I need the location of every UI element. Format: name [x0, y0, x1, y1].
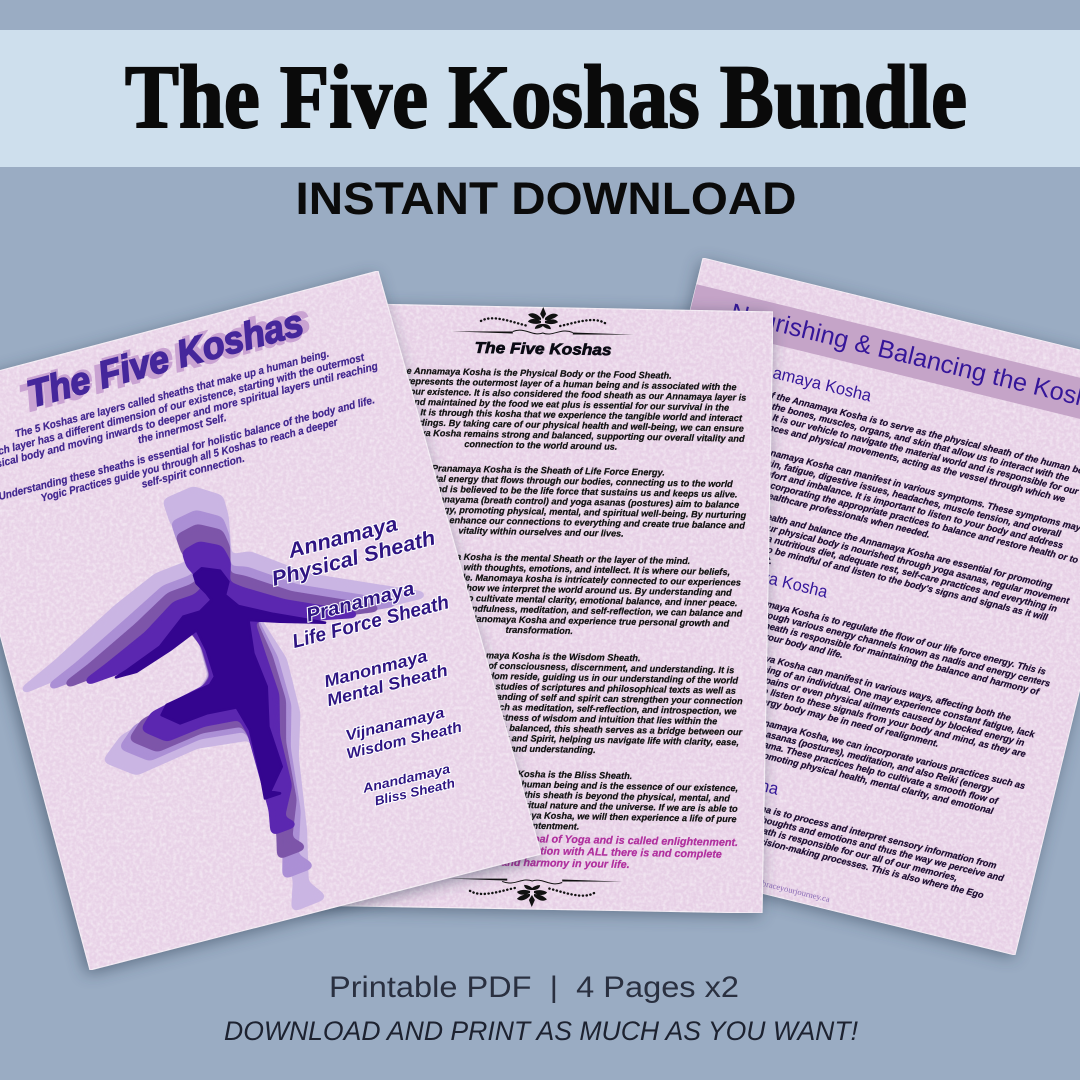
text: Annamaya paragraphs: experiences and physical movements, acting as the vessel through which we — [736, 415, 1066, 504]
text: Manomaya paragraph: the world. This sheath is responsible for our all of our memories, — [681, 806, 959, 883]
label: Manonmaya: Mental Sheath — [325, 661, 450, 710]
text: Vijnanamaya: through the studies of scriptures and philosophical texts as well as — [442, 680, 736, 696]
icon: bottom ornament — [447, 878, 622, 909]
silhouette: mental layer — [69, 528, 375, 855]
label: Manonmaya: Manonmaya — [322, 646, 429, 691]
label: Pranamaya: Pranamaya — [304, 578, 417, 627]
callout: pink closing text: A sense of connection with ALL there is and complete — [444, 844, 722, 861]
subtitle: INSTANT DOWNLOAD — [296, 173, 796, 224]
text: Pranamaya paragraphs: energy, promoting physical health, mental clarity, and emotional — [719, 740, 995, 816]
callout: pink closing text: peace and harmony in your life. — [467, 856, 630, 871]
text: Vijnanamaya: The Vijnanamaya Kosha is the Wisdom Sheath. — [435, 649, 641, 663]
format line: Printable PDF | 4 Pages x2 — [329, 971, 739, 1004]
text: Annamaya paragraphs: support it. — [727, 546, 773, 566]
text: Annamaya paragraphs: include pain, fatigue, digestive issues, headaches, muscle tension, and overall — [726, 448, 1062, 539]
text: Pranamaya paragraphs: of energy, pains or even physical ailments caused by blocked energy in — [719, 664, 1026, 748]
text: Pranamaya: around us and is believed to be the life force that sustains us and keeps us alive. — [384, 483, 738, 500]
label: Pranamaya: Life Force Sheath — [290, 591, 451, 653]
text: Annamaya: It represents the outermost layer of a human being and is associated with the — [398, 376, 737, 392]
text: Pranamaya paragraphs: yoga asanas (postures), meditation, and also Reiki (energy — [741, 723, 994, 794]
text: introduction — [0, 337, 394, 530]
text: Manomaya — [393, 551, 744, 639]
callout: pink closing text: This is the ultimate goal of Yoga and is called enlightenment. — [425, 831, 738, 849]
text: Anandamaya: joy and contentment. — [486, 820, 579, 832]
text: Annamaya: The Annamaya Kosha is the Physical Body or the Food Sheath. — [395, 366, 672, 381]
silhouette: wisdom layer — [52, 514, 393, 875]
text: Pranamaya paragraphs: Imbalances in the Pranamaya Kosha can manifest in various ways, affecting both the — [649, 625, 1012, 723]
label: Vijnanamaya — [341, 701, 464, 763]
label: Annamaya: Physical Sheath — [269, 526, 438, 591]
text: Annamaya paragraphs: It comprises the bones, muscles, organs, and skin that allow us to interact with the — [716, 388, 1070, 483]
heading: The Five Koshas — [23, 298, 314, 414]
label: Annamaya — [264, 504, 438, 591]
text: Vijnanamaya: can tap into the vastness of wisdom and intuition that lies within the — [419, 711, 717, 726]
text: Pranamaya paragraphs: This sheath is responsible for maintaining the balance and harmony of — [737, 614, 1041, 697]
text: Anandamaya: Unlike the others, this sheath is beyond the physical, mental, and — [444, 788, 730, 803]
text: Pranamaya paragraphs: To balance the Pranamaya Kosha, we can incorporate various practices such as — [684, 699, 1026, 791]
text: Manomaya: transformation. — [506, 625, 573, 636]
text: Vijnanamaya — [368, 648, 744, 758]
text: Vijnanamaya: grace, and understanding. — [480, 743, 596, 755]
text: Pranamaya paragraphs: physical well-being of an individual. One may experience constant fatigue, lack — [697, 648, 1037, 740]
section heading: Annamaya: Annamaya Kosha — [742, 356, 874, 406]
text: Vijnanamaya: Through practices such as meditation, self-reflection, and introspection, we — [406, 700, 737, 716]
silhouette: life force layer — [89, 545, 354, 831]
text: Annamaya: physical world. It is through this kosha that we experience the tangible world and interact — [350, 406, 743, 423]
label: Anandamaya: Bliss Sheath — [373, 775, 456, 808]
text: Annamaya paragraphs: Nourishing health and balance the Annamaya Kosha are essential for promoting — [711, 498, 1054, 591]
text: Annamaya paragraphs: wellness. Your physical body is nourished through yoga asanas, regular movement — [714, 510, 1071, 606]
silhouette: bliss layer — [25, 490, 422, 907]
text: Pranamaya paragraphs: done through various energy channels known as nadis and energy centers — [731, 602, 1051, 689]
text: Anandamaya: reach our Anandamaya Kosha, we will then experience a life of pure — [440, 809, 737, 824]
text: Manomaya paragraph: beliefs and decision-making processes. This is also where the Ego — [699, 821, 985, 900]
panel: right page nourishing and balancing — [558, 258, 1080, 958]
text: Annamaya: that the Annamaya Kosha remains strong and balanced, supporting our overall vitality and — [349, 427, 745, 444]
text: Annamaya — [325, 364, 747, 454]
chart: layered body silhouette — [25, 490, 422, 907]
text: Annamaya paragraphs: between. Also be mindful of and listen to the body's signs and signals as it will — [712, 531, 1049, 623]
text: Manomaya: The Manomaya Kosha is the mental Sheath or the layer of the mind. — [395, 551, 690, 566]
text: Annamaya paragraphs — [656, 372, 1080, 637]
text: Annamaya: physical aspect of our existence. It is also considered the food sheath as our Annamaya layer is — [326, 385, 746, 403]
text: Anandamaya: The Anandamaya Kosha is the Bliss Sheath. — [439, 767, 632, 781]
text: Annamaya paragraphs: and a nutritious diet, adequate rest, self-care practices and everything in — [748, 529, 1058, 614]
tagline: DOWNLOAD AND PRINT AS MUCH AS YOU WANT! — [224, 1016, 858, 1046]
text: introduction: The 5 Koshas are layers called sheaths that make up a human being. — [14, 348, 330, 440]
text: Annamaya: with our surroundings. By taking care of our physical health and well-being, we can ensure — [346, 416, 744, 434]
text: Annamaya paragraphs: world. It is our vehicle to navigate the material world and is responsible for our — [743, 405, 1080, 497]
text: Vijnanamaya: Mind, Body and Spirit, helping us navigate life with clarity, ease, — [459, 732, 739, 747]
text: Annamaya: created and maintained by the food we eat plus is essential for our survival in the — [374, 396, 729, 413]
silhouette: physical layer — [116, 568, 325, 798]
text: Manomaya: learning to cultivate mental clarity, emotional balance, and inner peace. — [426, 592, 738, 608]
text: Manomaya paragraph: The role of the Manomaya Kosha is to process and interpret sensory information from — [630, 772, 998, 871]
panel: middle page the five koshas — [298, 303, 773, 916]
heading: The Five Koshas — [474, 340, 612, 359]
text: Pranamaya paragraphs — [627, 574, 1054, 822]
section heading: Pranamaya: Pranamaya Kosha — [695, 551, 830, 602]
text: Vijnanamaya: When it is balanced, this sheath serves as a bridge between our — [463, 722, 743, 737]
text: Annamaya paragraphs: them by incorporating the appropriate practices to balance and restore health or to — [725, 470, 1080, 565]
text: Pranamaya: The Pranamaya Kosha is the Sheath of Life Force Energy. — [413, 463, 665, 478]
text: Pranamaya paragraphs: healing) and pranayama. These practices help to cultivate a smooth flow of — [678, 719, 1000, 807]
text: Pranamaya paragraphs: telling you your energy body may be in need of realignment. — [682, 677, 940, 749]
label: Manonmaya — [320, 642, 450, 710]
label: Anandamaya: Anandamaya — [360, 761, 451, 796]
text: Pranamaya: this sheath we enhance our connections to everything and create true balance and — [383, 514, 745, 531]
header band — [687, 284, 1080, 434]
text: Annamaya: connection to the world around us. — [464, 439, 617, 452]
icon: top ornament — [452, 305, 634, 336]
text: introduction: the innermost Self. — [137, 412, 228, 446]
text: Pranamaya paragraphs: It is vital to listen to these signals from your body and mind, as they are — [720, 675, 1027, 759]
text: Anandamaya: linking our spiritual nature and the universe. If we are is able to — [462, 799, 738, 814]
text: Anandamaya — [436, 767, 739, 835]
text: Vijnanamaya: where our intuition and wisdom reside, guiding us in our understanding of the world — [370, 669, 739, 686]
text: Annamaya paragraphs: discomfort and imbalance. It is important to listen to your body and address — [739, 462, 1064, 551]
text: introduction: Understanding these sheaths is essential for holistic balance of the body and life. — [0, 394, 376, 503]
title: The Five Koshas Bundle — [125, 48, 967, 147]
panel: left page the five koshas overview — [0, 271, 541, 974]
section heading: Manomaya: Manomaya Kosha — [646, 748, 781, 799]
text: Vijnanamaya: our understanding of self and spirit can strengthen your connection — [446, 691, 743, 706]
label: Anandamaya — [360, 761, 456, 811]
text: introduction: Yogic Practices guide you through all 5 Koshas to reach a deeper — [40, 416, 340, 505]
text: Pranamaya: Practices like pranayama (breath control) and yoga asanas (postures) aim to balance — [369, 493, 739, 510]
text: Manomaya: patterns reside. Manomaya kosha is intricately connected to our experiences — [403, 571, 741, 588]
text: Manomaya: and how we interpret the world around us. By understanding and — [447, 582, 732, 598]
title banner — [0, 30, 1080, 167]
heading: The Five Koshas — [16, 306, 307, 421]
text: Pranamaya paragraphs: energy in your body and life. — [720, 621, 844, 660]
text: Annamaya paragraphs: consult with healthcare professionals when needed. — [707, 476, 931, 540]
label: Annamaya: Annamaya — [285, 512, 400, 563]
footer url: www.embraceyourjourney.ca — [731, 871, 831, 904]
text: Anandamaya: It is the core of the human being and is the essence of our existence, — [437, 778, 738, 793]
text: Manomaya: Through mindfulness, meditation, and self-reflection, we can balance and — [421, 603, 743, 619]
text: introduction: self-spirit connection. — [140, 453, 246, 491]
text: Pranamaya paragraphs: The role of the Pranamaya Kosha is to regulate the flow of our life force energy. This is — [677, 577, 1047, 677]
text: Manomaya: It deals with thoughts, emotions, and intellect. It is where our beliefs, — [429, 562, 730, 577]
label: Vijnanamaya: Vijnanamaya — [344, 704, 446, 744]
text: Pranamaya — [368, 462, 747, 541]
label: Vijnanamaya: Wisdom Sheath — [345, 719, 464, 763]
text: Manomaya: nourish our Manomaya Kosha and experience true personal growth and — [415, 613, 730, 629]
text: Annamaya paragraphs: Imbalances in the Annamaya Kosha can manifest in various symptoms. These symptoms may — [681, 426, 1080, 533]
text: Manomaya paragraph: our senses, our thoughts and emotions and thus the way we perceive and — [688, 797, 1005, 883]
text: Pranamaya: this energy, promoting physical, mental, and spiritual well-being. By nurturing — [405, 504, 747, 520]
heading: The Five Koshas — [23, 302, 308, 416]
callout: pink closing text — [425, 831, 738, 873]
text: Pranamaya: vitality within ourselves and our lives. — [458, 526, 624, 539]
text: Vijnanamaya: It is the sheath of consciousness, discernment, and understanding. It is — [421, 659, 734, 675]
text: Pranamaya: It is the vital energy that flows through our bodies, connecting us to the world — [393, 473, 733, 489]
